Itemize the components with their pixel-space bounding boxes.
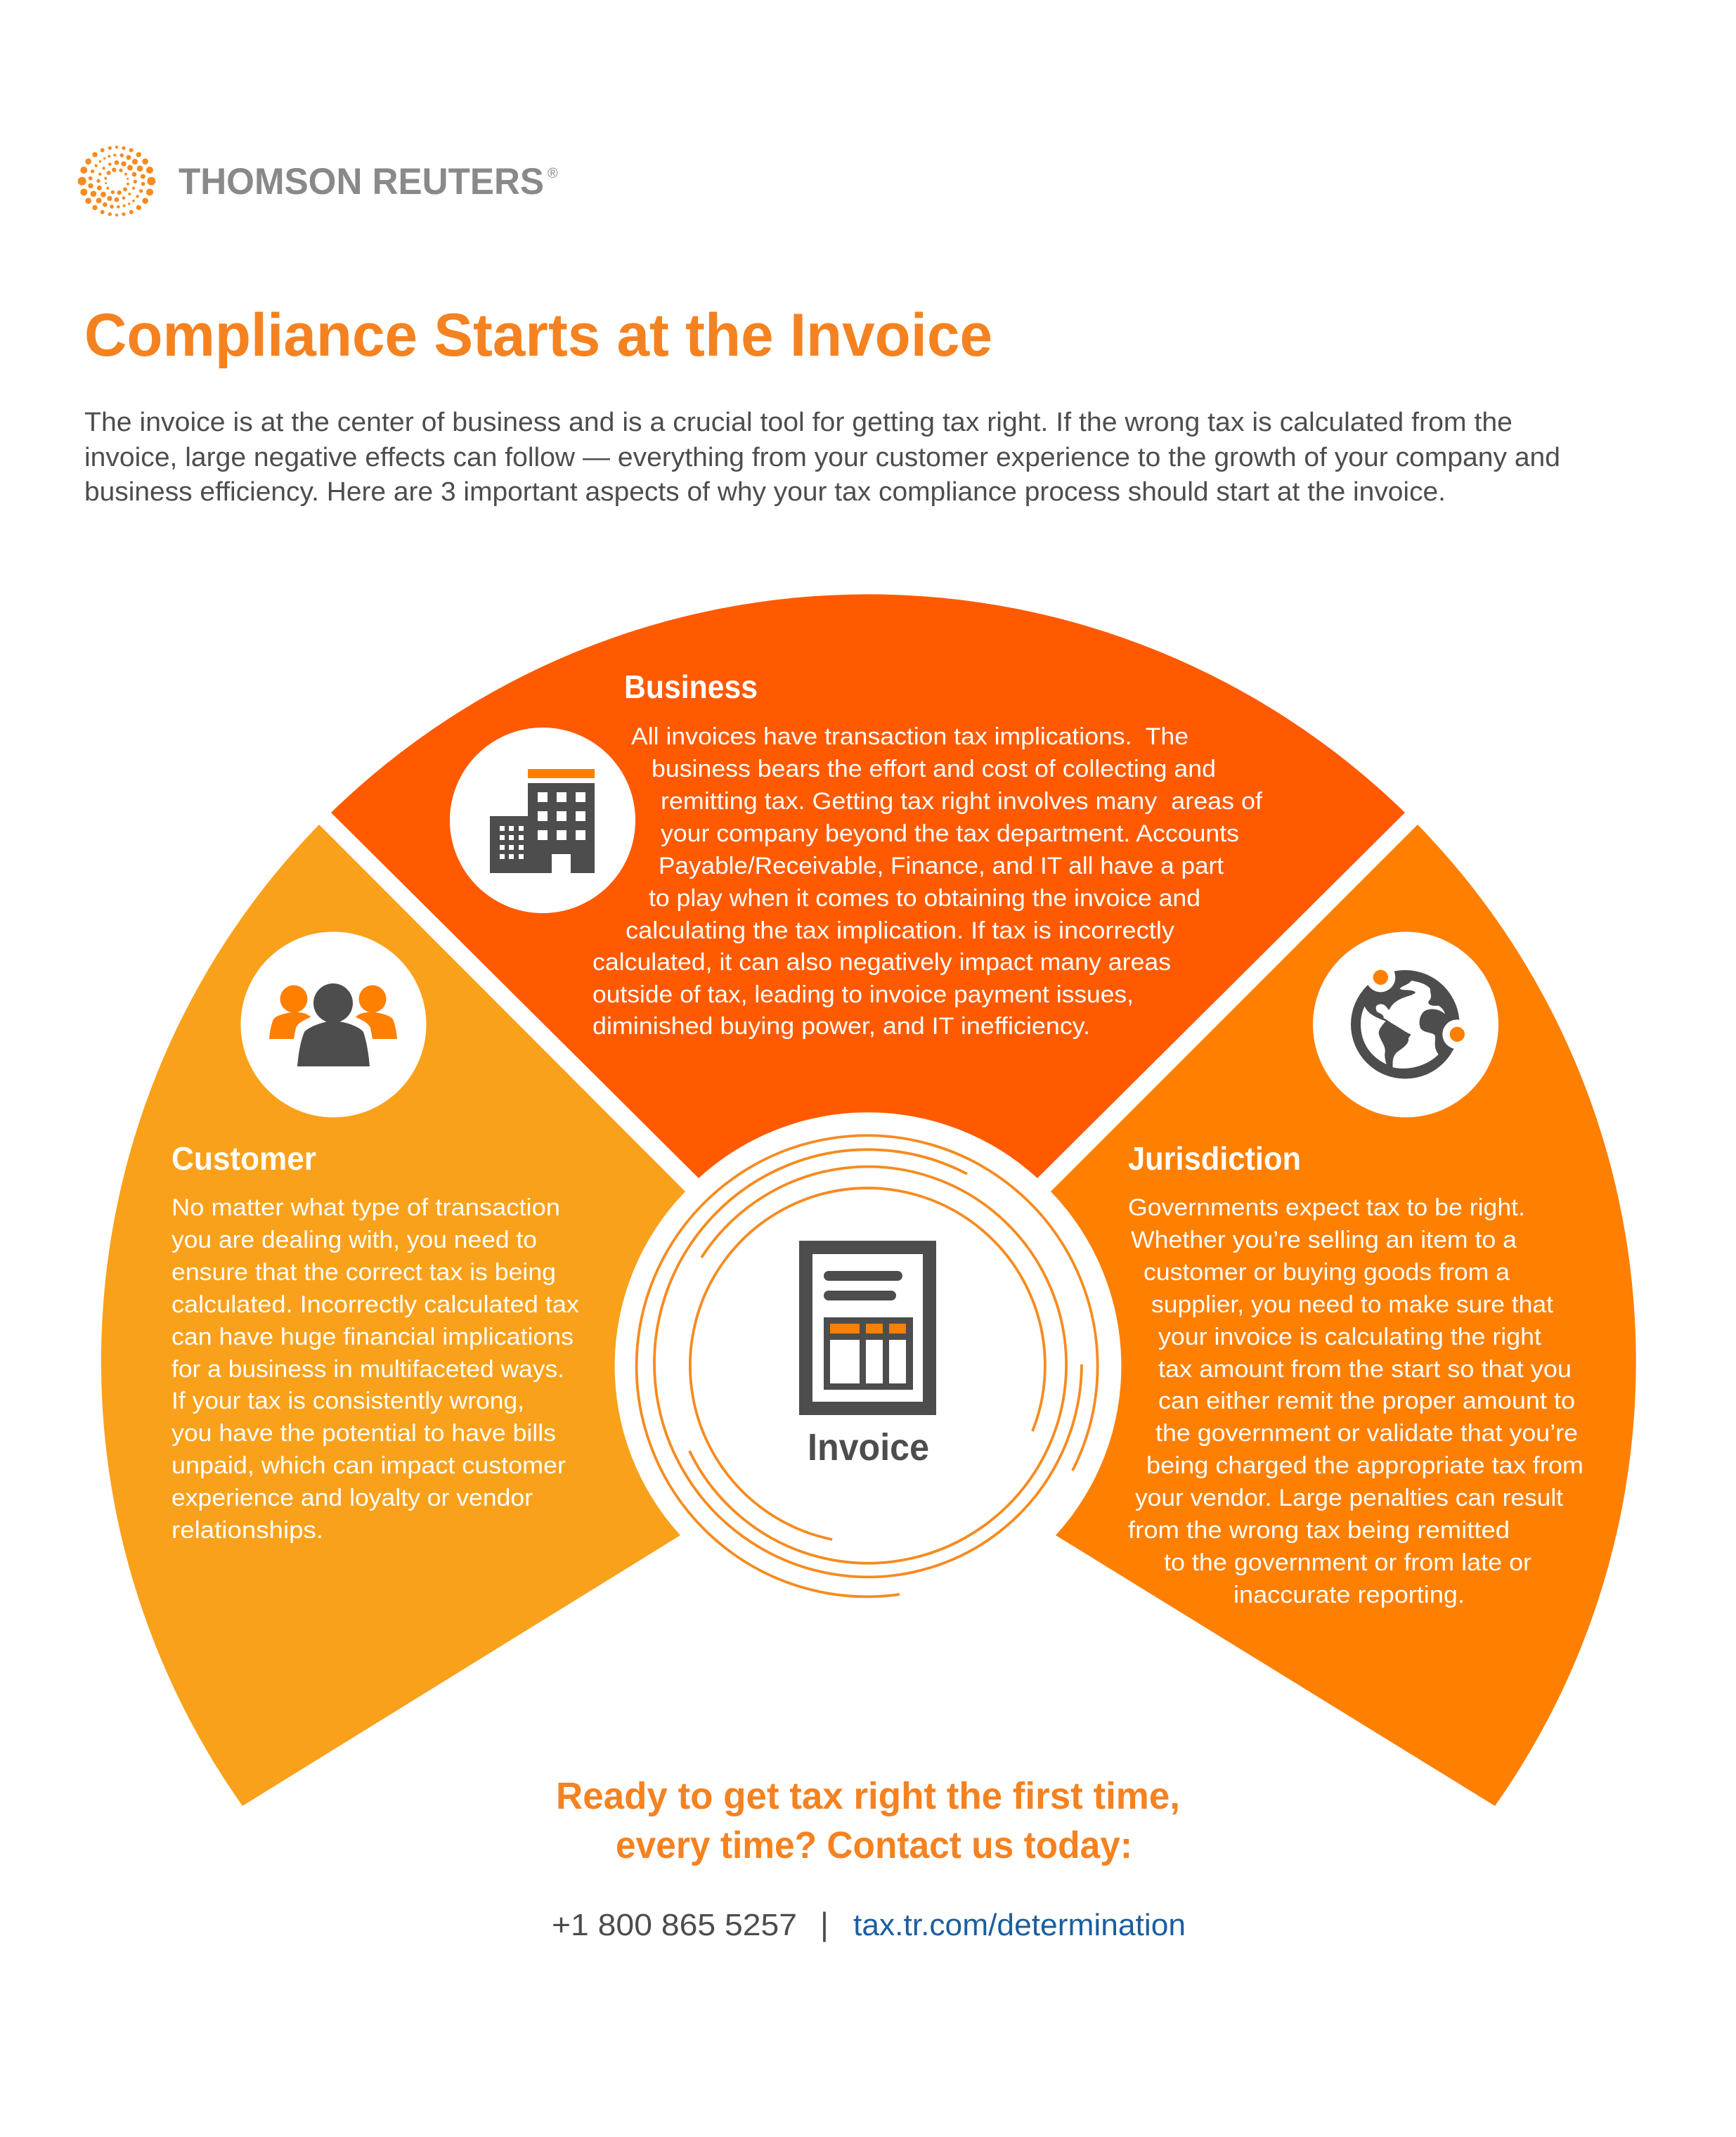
customer text [171, 1194, 579, 1544]
business text: your company beyond the tax department. Accounts [661, 820, 1239, 847]
jurisdiction wedge [1051, 825, 1636, 1806]
jurisdiction text: your invoice is calculating the right [1158, 1324, 1542, 1350]
customer text: can have huge financial implications [171, 1324, 574, 1350]
logo: Thomson Reuters [78, 146, 558, 217]
business heading: Business [624, 669, 758, 705]
call to action: Ready to get tax right the first time, [556, 1775, 1180, 1817]
intro paragraph [84, 408, 1560, 507]
business text: Payable/Receivable, Finance, and IT all have a part [659, 853, 1224, 879]
jurisdiction heading: Jurisdiction [1128, 1140, 1301, 1177]
registered mark: ® [548, 166, 558, 181]
business text: calculating the tax implication. If tax is incorrectly [626, 917, 1174, 944]
jurisdiction text: Whether you’re selling an item to a [1131, 1227, 1517, 1253]
customer text: relationships. [171, 1517, 323, 1544]
call to action [556, 1775, 1180, 1866]
panel: jurisdiction [1051, 825, 1636, 1806]
intro paragraph: invoice, large negative effects can follow — everything from your customer experience to the growth of your company and [84, 443, 1560, 472]
customer text: calculated. Incorrectly calculated tax [171, 1291, 579, 1318]
customer text: ensure that the correct tax is being [171, 1259, 556, 1286]
jurisdiction text: inaccurate reporting. [1233, 1582, 1465, 1608]
contact details [552, 1906, 1186, 1942]
jurisdiction text: supplier, you need to make sure that [1151, 1291, 1554, 1318]
invoice label: Invoice [808, 1426, 929, 1468]
icon: building [450, 728, 635, 913]
contact details: | [820, 1906, 829, 1942]
panel: customer [101, 825, 685, 1806]
contact details: tax.tr.com/determination [853, 1908, 1186, 1942]
business text: business bears the effort and cost of collecting and [652, 756, 1216, 782]
business text: outside of tax, leading to invoice payment issues, [592, 981, 1134, 1008]
jurisdiction text: being charged the appropriate tax from [1146, 1452, 1583, 1479]
business text: remitting tax. Getting tax right involves many areas of [661, 788, 1263, 815]
jurisdiction text: tax amount from the start so that you [1158, 1356, 1572, 1383]
icon: invoice document [799, 1241, 936, 1415]
business wedge [331, 594, 1405, 1178]
icon: people [240, 932, 426, 1118]
customer text: you are dealing with, you need to [171, 1227, 537, 1253]
business text: diminished buying power, and IT inefficiency. [592, 1013, 1090, 1040]
contact details: +1 800 865 5257 [552, 1908, 797, 1942]
panel: business [331, 594, 1405, 1178]
center: invoice [637, 1135, 1098, 1596]
jurisdiction text: customer or buying goods from a [1144, 1259, 1510, 1286]
logo dot emblem [78, 146, 155, 217]
jurisdiction text: your vendor. Large penalties can result [1135, 1485, 1564, 1511]
jurisdiction text: Governments expect tax to be right. [1128, 1194, 1525, 1221]
jurisdiction text: can either remit the proper amount to [1158, 1388, 1575, 1414]
business text: to play when it comes to obtaining the invoice and [649, 885, 1200, 912]
intro paragraph: business efficiency. Here are 3 important aspects of why your tax compliance process should start at the invoice. [84, 477, 1446, 507]
customer text: experience and loyalty or vendor [171, 1485, 533, 1511]
concentric arcs [637, 1135, 1098, 1596]
jurisdiction text [1128, 1194, 1583, 1608]
customer text: for a business in multifaceted ways. [171, 1356, 564, 1383]
jurisdiction text: from the wrong tax being remitted [1128, 1517, 1510, 1544]
intro paragraph: The invoice is at the center of business and is a crucial tool for getting tax right. If the wrong tax is calculated from the [84, 408, 1512, 437]
business text [592, 723, 1263, 1040]
customer text: If your tax is consistently wrong, [171, 1388, 524, 1414]
jurisdiction text: the government or validate that you’re [1155, 1420, 1578, 1447]
customer heading: Customer [171, 1140, 316, 1177]
business text: calculated, it can also negatively impact many areas [592, 949, 1171, 976]
customer wedge [101, 825, 685, 1806]
customer text: unpaid, which can impact customer [171, 1452, 566, 1479]
business text: All invoices have transaction tax implications. The [631, 723, 1188, 750]
customer text: No matter what type of transaction [171, 1194, 560, 1221]
logo wordmark: THOMSON REUTERS [179, 161, 544, 202]
customer text: you have the potential to have bills [171, 1420, 556, 1447]
icon: globe [1313, 932, 1498, 1118]
title: Compliance Starts at the Invoice [84, 302, 992, 369]
call to action: every time? Contact us today: [616, 1824, 1132, 1866]
jurisdiction text: to the government or from late or [1164, 1549, 1531, 1576]
